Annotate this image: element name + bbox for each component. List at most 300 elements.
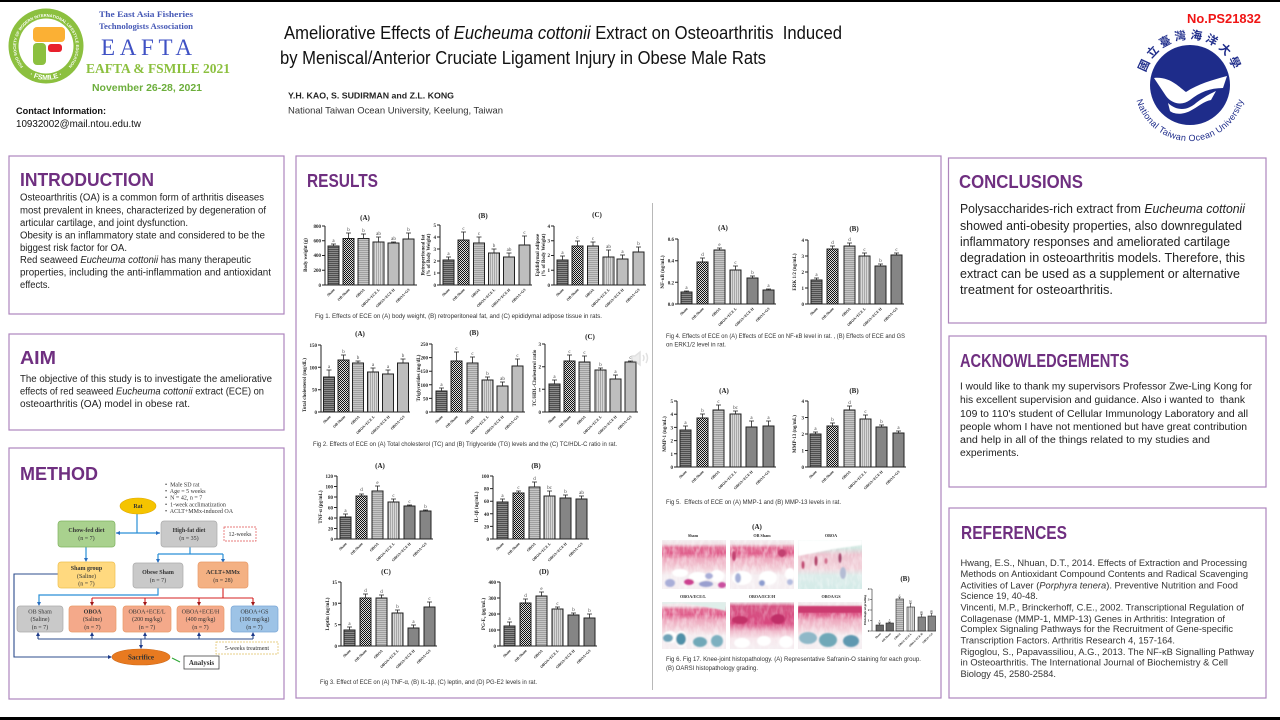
chart: fig 3C leptin: d <box>364 589 367 594</box>
node: OBOA+GS: OBOA+GS <box>240 610 269 616</box>
chart: fig 1C epididymal adipose: (C) <box>592 211 603 219</box>
chart: fig 3C leptin: Sham <box>342 648 352 658</box>
chart: fig 1B retroperitoneal fat: 3 <box>434 248 436 253</box>
chart: fig 3B IL-1 beta: Sham <box>495 541 505 551</box>
chart: fig 1C epididymal adipose: OBOA+ECE L <box>590 288 611 308</box>
EAFTA association name <box>99 9 194 60</box>
chart: fig 2C TC/HDL-C ratio: c <box>583 351 586 356</box>
chart: fig 2B triglycerides: 150 <box>420 370 428 375</box>
chart: fig 3C leptin: OBOA+GS <box>416 649 432 665</box>
chart: fig 2B triglycerides: OB Sham <box>445 414 459 429</box>
flow diagram <box>14 482 278 669</box>
chart: fig 1A body weight: 600 <box>314 240 322 244</box>
chart: fig 3D PG-E2: 0 <box>494 645 496 650</box>
chart: fig 3B IL-1 beta: 0 <box>486 538 490 543</box>
chart: fig 6B OARSI grading: (B) <box>900 575 910 583</box>
chart: fig 3C leptin <box>326 568 437 669</box>
histology label row 2: OBOA/ECE/H <box>749 594 776 599</box>
chart: fig 3D PG-E2: 400 <box>488 581 496 586</box>
chart: fig 1C epididymal adipose: b <box>637 242 640 247</box>
panel: conclusions <box>948 158 1266 323</box>
FSMILE logo: · FSMILE · <box>30 73 61 80</box>
histology image: OBOA/ECE/L <box>662 602 726 649</box>
chart: fig 3D PG-E2: PG-E₂ (pg/mL) <box>482 598 487 630</box>
note: 5 weeks treatment: 5-weeks treatment <box>225 646 269 652</box>
heading: introduction: INTRODUCTION <box>20 170 154 190</box>
contact information: 10932002@mail.ntou.edu.tw <box>16 119 142 130</box>
poster title: by Meniscal/Anterior Cruciate Ligament Injury in Obese Male Rats <box>280 48 766 68</box>
chart: fig 3A TNF-alpha: e <box>376 481 379 486</box>
chart: fig 3D PG-E2: OBOA+GS <box>576 649 592 665</box>
chart: fig 5B MMP-13: b <box>880 420 883 425</box>
caption: fig 4: Fig 4. Effects of ECE on (A) Effects of ECE on NF-κB level in rat. , (B) Effects of ECE and GS <box>666 333 906 340</box>
chart: fig 2C TC/HDL-C ratio: OBOA+GS <box>617 415 633 431</box>
NTOU logo: National Taiwan Ocean University <box>1136 99 1244 142</box>
chart: fig 3B IL-1 beta: a <box>501 494 504 499</box>
chart: fig 2B triglycerides: (B) <box>469 329 479 337</box>
chart: fig 1B retroperitoneal fat: ab <box>507 248 512 253</box>
chart: fig 5A MMP-1: MMP-1 (ng/mL) <box>663 416 668 452</box>
chart: fig 2A total cholesterol: 100 <box>310 366 318 371</box>
chart: fig 3A TNF-alpha: (A) <box>375 462 386 470</box>
histology image: OB sham <box>730 540 794 589</box>
text: references list: Activities of Laver ( Porphyra tenera ). Preventive Nutrition and Food <box>960 581 1238 591</box>
chart: fig 3A TNF-alpha <box>319 462 433 562</box>
caption: fig 1: Fig 1. Effects of ECE on (A) body weight, (B) retroperitoneal fat, and (C) epididymal adipose tissue in rats. <box>315 313 602 320</box>
node: analysis: Analysis <box>189 659 214 667</box>
chart: fig 5A MMP-1: a <box>750 416 753 421</box>
text: introduction body: biggest risk factor for OA. <box>20 243 127 254</box>
chart: fig 6B OARSI grading: 3 <box>868 598 870 602</box>
panel: acknowledgements <box>949 336 1266 487</box>
chart: fig 3D PG-E2 <box>482 568 597 669</box>
EAFTA association name: Technologists Association <box>99 21 193 31</box>
chart: fig 1A body weight: OBOA+ECE L <box>360 288 381 308</box>
chart: fig 4A NF-kB: a <box>685 286 688 291</box>
chart: fig 2C TC/HDL-C ratio: Sham <box>547 414 557 424</box>
chart: fig 2B triglycerides: 100 <box>420 384 428 389</box>
chart: fig 5B MMP-13: b <box>831 418 834 423</box>
chart: fig 5A MMP-1: bc <box>733 406 739 411</box>
chart: fig 6B OARSI grading: OB Sham <box>881 632 892 643</box>
chart: fig 1B retroperitoneal fat: (% of Body Weight) <box>427 233 432 276</box>
text: conclusions body: degradation in osteoarthritis models. Therefore, this <box>960 251 1245 265</box>
node: obese sham: (n = 7) <box>150 577 166 584</box>
histology label row 2: OBOA/ECE/L <box>680 594 706 599</box>
chart: fig 5B MMP-13: 3 <box>802 416 804 422</box>
caption: fig 2: Fig 2. Effects of ECE on (A) Total cholesterol (TC) and (B) Triglyceride (TG) levels and the (C) TC/HDL-C ratio in rat. <box>313 441 617 448</box>
chart: fig 3D PG-E2: OBOA <box>533 649 544 660</box>
chart: fig 3D PG-E2: b <box>588 609 591 614</box>
chart: fig 1C epididymal adipose: a <box>621 250 624 255</box>
node: OBOA: (n = 7) <box>84 624 101 631</box>
heading: method: METHOD <box>20 464 98 484</box>
chart: fig 3B IL-1 beta: OB Sham <box>507 541 521 556</box>
chart: fig 1B retroperitoneal fat: 0 <box>434 284 436 289</box>
chart: fig 6B OARSI grading: 4 <box>868 587 870 591</box>
chart: fig 2B triglycerides: a <box>440 383 443 388</box>
histology label row 2: OBOA/GS <box>821 594 841 599</box>
chart: fig 3D PG-E2: OBOA+ECE L <box>539 649 560 669</box>
study details list <box>165 482 234 515</box>
study details list: • Male SD rat <box>165 482 200 488</box>
chart: fig 1C epididymal adipose: (% of Body Weight) <box>542 233 547 276</box>
figure: histology panel A <box>662 523 862 649</box>
chart: fig 1A body weight: 200 <box>314 269 322 274</box>
poster title <box>280 23 842 68</box>
chart: fig 1B retroperitoneal fat: OBOA+ECE H <box>491 288 511 308</box>
chart: fig 1A body weight <box>304 214 417 308</box>
chart: fig 3B IL-1 beta: OBOA+ECE H <box>547 542 568 562</box>
chart: fig 1B retroperitoneal fat: c <box>462 227 465 232</box>
chart: fig 4A NF-kB: Sham <box>679 306 689 316</box>
chart: fig 5B MMP-13: OBOA+ECE H <box>863 470 884 490</box>
chart: fig 1C epididymal adipose: 3 <box>548 240 550 244</box>
chart: fig 5B MMP-13: (B) <box>849 387 859 395</box>
note: 12 weeks <box>224 527 256 541</box>
chart: fig 2C TC/HDL-C ratio: OBOA+ECE H <box>597 415 618 435</box>
chart: fig 3B IL-1 beta: OBOA <box>526 542 537 553</box>
chart: fig 3C leptin: d <box>380 590 383 595</box>
chart: fig 3B IL-1 beta: 60 <box>484 500 490 505</box>
chart: fig 3A TNF-alpha: OBOA+ECE H <box>391 542 412 562</box>
chart: fig 1C epididymal adipose: OB Sham <box>566 287 580 302</box>
node: high-fat diet: High-fat diet <box>173 528 205 534</box>
text: conclusions body: Polysaccharides-rich extract from Eucheuma cottonii <box>960 202 1246 216</box>
chart: fig 6B OARSI grading: 2 <box>868 608 870 612</box>
chart: fig 5A MMP-1: b <box>701 409 704 414</box>
chart: fig 6B OARSI grading: c <box>899 593 901 597</box>
chart: fig 3B IL-1 beta: b <box>564 490 567 495</box>
chart: fig 2A total cholesterol: b <box>357 356 360 361</box>
chart: fig 2A total cholesterol: OBOA+GS <box>390 415 406 431</box>
node: high-fat diet: (n = 35) <box>179 535 199 542</box>
chart: fig 4B ERK 1/2: OBOA+ECE L <box>846 307 867 327</box>
chart: fig 2A total cholesterol: OBOA+ECE L <box>355 415 376 435</box>
chart: fig 4B ERK 1/2: 3 <box>802 255 804 260</box>
chart: fig 3B IL-1 beta: 40 <box>484 513 490 518</box>
EAFTA association name: EAFTA <box>101 35 192 60</box>
chart: fig 6B OARSI grading: bc <box>909 599 913 603</box>
heading: acknowledgements: ACKNOWLEDGEMENTS <box>960 351 1129 371</box>
chart: fig 5A MMP-1: 4 <box>670 413 674 418</box>
chart: fig 2B triglycerides: OBOA <box>464 415 475 426</box>
chart: fig 1C epididymal adipose: 2 <box>548 254 550 259</box>
text: acknowledgements body <box>960 382 1253 459</box>
chart: fig 5B MMP-13: 1 <box>802 450 804 454</box>
chart: fig 5B MMP-13: MMP-13 (ng/mL) <box>793 415 798 453</box>
text: introduction body: effects. <box>20 280 50 291</box>
caption: fig 4: on ERK1/2 level in rat. <box>666 342 726 348</box>
chart: fig 2A total cholesterol: a <box>328 365 331 370</box>
text: references list: Complex Signaling Pathways for the Recruitment of Gene-specific <box>960 624 1234 634</box>
chart: fig 2C TC/HDL-C ratio: a <box>614 370 617 375</box>
chart: fig 2C TC/HDL-C ratio: 1 <box>538 388 542 393</box>
chart: fig 3D PG-E2: (D) <box>539 568 550 576</box>
text: acknowledgements body: his excellent supervision and guidance. Also i wanted to thank <box>960 395 1246 406</box>
chart: fig 3D PG-E2: e <box>540 587 543 592</box>
heading: aim: AIM <box>20 348 56 368</box>
figure: histology panel A: (A) <box>752 523 763 531</box>
node: chow-fed diet: Chow-fed diet <box>68 528 105 534</box>
chart: fig 1A body weight: b <box>347 228 350 233</box>
chart: fig 3A TNF-alpha: OBOA+GS <box>412 542 428 558</box>
chart: fig 2A total cholesterol: OB Sham <box>332 414 347 429</box>
chart: fig 2C TC/HDL-C ratio: (C) <box>585 333 596 341</box>
chart: fig 2B triglycerides: 0 <box>426 411 428 416</box>
chart: fig 4B ERK 1/2: (B) <box>849 225 859 233</box>
chart: fig 3A TNF-alpha: 40 <box>328 517 334 522</box>
chart: fig 1A body weight: Sham <box>326 287 336 297</box>
chart: fig 1B retroperitoneal fat: (B) <box>478 212 488 220</box>
chart: fig 1B retroperitoneal fat: 1 <box>434 272 436 277</box>
caption: fig 6: Fig 6. Fig 17. Knee-joint histopathology. (A) Representative Safranin-O staining for each group. <box>666 656 921 663</box>
chart: fig 3C leptin: b <box>396 605 399 610</box>
chart: fig 5A MMP-1: OBOA <box>710 470 721 481</box>
chart: fig 3D PG-E2: 300 <box>488 597 496 602</box>
chart: fig 2B triglycerides: 200 <box>420 357 428 362</box>
chart: fig 2A total cholesterol: Total cholesterol (mg/dL) <box>303 358 308 412</box>
text: references list: in Osteoarthritis. The International Journal of Biochemistry & Cell <box>960 658 1228 668</box>
chart: fig 5A MMP-1: c <box>717 400 720 405</box>
chart: fig 4A NF-kB: OB Sham <box>691 306 705 321</box>
chart: fig 3A TNF-alpha: TNF-α (pg/mL) <box>319 490 324 524</box>
chart: fig 2B triglycerides: OBOA+ECE H <box>484 415 505 435</box>
text: references list: Science 19, 40-48. <box>960 591 1038 601</box>
conference title: EAFTA & FSMILE 2021 <box>86 62 230 77</box>
chart: fig 4A NF-kB <box>661 224 776 327</box>
chart: fig 1A body weight: 0 <box>318 284 322 289</box>
chart: fig 2C TC/HDL-C ratio: c <box>568 350 571 355</box>
chart: fig 1B retroperitoneal fat: Sham <box>441 287 451 297</box>
chart: fig 1C epididymal adipose: 1 <box>548 269 550 274</box>
chart: fig 2C TC/HDL-C ratio: a <box>553 375 556 380</box>
chart: fig 1C epididymal adipose: Sham <box>555 287 565 297</box>
chart: fig 5A MMP-1: 5 <box>670 400 674 405</box>
chart: fig 2C TC/HDL-C ratio: c <box>629 356 632 361</box>
chart: fig 1B retroperitoneal fat <box>422 212 532 308</box>
chart: fig 2A total cholesterol: a <box>387 365 390 370</box>
chart: fig 2B triglycerides: Sham <box>434 414 444 424</box>
chart: fig 5A MMP-1 <box>663 387 776 490</box>
chart: fig 1B retroperitoneal fat: 5 <box>434 224 436 229</box>
node: OBOA+ECE/L: (200 mg/kg) <box>132 616 162 623</box>
chart: fig 1B retroperitoneal fat: 4 <box>434 236 436 241</box>
chart: fig 3C leptin: (C) <box>381 568 392 576</box>
chart: fig 1A body weight: 400 <box>314 254 322 259</box>
histology image: OBOA/ECE/H <box>730 602 794 649</box>
chart: fig 6B OARSI grading: ab <box>920 610 923 614</box>
chart: fig 4A NF-kB: OBOA+ECE H <box>734 307 755 327</box>
chart: fig 1A body weight: OBOA+ECE H <box>375 288 396 308</box>
flow arrows: dark blue <box>14 574 255 659</box>
chart: fig 2A total cholesterol: (A) <box>355 330 366 338</box>
caption: fig 6: (B) OARSI histopathology grading. <box>666 665 758 672</box>
chart: fig 3C leptin: OB Sham <box>354 648 368 663</box>
chart: fig 1B retroperitoneal fat: 2 <box>434 260 436 265</box>
text: references list: Hwang, E.S., Nhuan, D.T., 2014. Effects of Extraction and Processing <box>960 558 1247 568</box>
histology image: OBOA <box>798 540 862 589</box>
chart: fig 3C leptin: 5 <box>334 624 338 629</box>
chart: fig 6B OARSI grading: OBOA <box>894 633 902 641</box>
chart: fig 3D PG-E2: a <box>508 617 511 622</box>
chart: fig 1B retroperitoneal fat: OBOA+ECE L <box>476 288 497 308</box>
chart: fig 4B ERK 1/2: d <box>831 241 834 246</box>
caption: fig 6 <box>666 656 921 672</box>
text: aim body: effects of red seaweed Eucheuma cottonii extract (ECE) on <box>20 386 264 398</box>
caption: fig 4 <box>666 333 906 348</box>
chart: fig 6B OARSI grading: ab <box>930 609 933 613</box>
chart: fig 1B retroperitoneal fat: b <box>493 244 496 249</box>
chart: fig 4B ERK 1/2: 2 <box>802 271 804 276</box>
chart: fig 3A TNF-alpha: c <box>408 500 411 505</box>
node: chow-fed diet <box>58 521 115 547</box>
chart: fig 2C TC/HDL-C ratio: TC/HDL-Cholesterol ratio <box>533 349 538 406</box>
node: ACLT+MMx: (n = 28) <box>213 577 233 584</box>
chart: fig 2B triglycerides: OBOA+GS <box>504 415 520 431</box>
node: OBOA+GS: (n = 7) <box>246 624 263 631</box>
chart: fig 1A body weight: OBOA+GS <box>395 288 411 304</box>
chart: fig 3A TNF-alpha: 80 <box>328 496 334 501</box>
chart: fig 6B OARSI grading: Histological grading <box>863 595 867 625</box>
chart: fig 6B OARSI grading: a <box>879 618 881 622</box>
chart: fig 4B ERK 1/2: OB Sham <box>821 306 835 321</box>
chart: fig 6B OARSI grading: 1 <box>868 618 870 622</box>
chart: fig 4B ERK 1/2: 4 <box>802 239 804 244</box>
chart: fig 2A total cholesterol <box>303 330 410 435</box>
text: introduction body <box>20 192 271 291</box>
chart: fig 4B ERK 1/2: b <box>879 259 882 264</box>
chart: fig 3C leptin: 10 <box>332 602 338 607</box>
chart: fig 1A body weight: a <box>332 239 335 244</box>
authors: Y.H. KAO, S. SUDIRMAN and Z.L. KONG <box>288 90 454 100</box>
chart: fig 2B triglycerides: c <box>471 352 474 357</box>
node: OBOA+ECE/H: (n = 7) <box>192 624 209 631</box>
chart: fig 4B ERK 1/2: a <box>815 273 818 278</box>
node: sacrifice: Sacrifice <box>128 654 154 662</box>
chart: fig 1C epididymal adipose: ab <box>606 245 611 250</box>
histology image: OBOA/GS <box>798 602 862 649</box>
histology label row 1: OB Sham <box>753 533 771 538</box>
chart: fig 3D PG-E2: c <box>556 602 559 607</box>
node: OBOA+ECE/H: OBOA+ECE/H <box>182 610 220 616</box>
chart: fig 1C epididymal adipose: Epididymal adipose <box>536 233 541 276</box>
text: references list: Rigoglou, S., Papavassiliou, A.G., 2013. The NF-κB Signalling Pathway <box>960 647 1255 657</box>
chart: fig 3D PG-E2: Sham <box>502 648 512 658</box>
text: references list: Methods on Antioxidant Compound Contents and Radical Scavenging <box>960 569 1248 579</box>
chart: fig 3A TNF-alpha: 120 <box>326 475 334 480</box>
chart: fig 1B retroperitoneal fat: c <box>523 231 526 236</box>
chart: fig 1C epididymal adipose: OBOA+ECE H <box>604 288 625 308</box>
chart: fig 1B retroperitoneal fat: a <box>447 252 450 257</box>
chart: fig 3B IL-1 beta: 20 <box>484 525 490 530</box>
chart: fig 1B retroperitoneal fat: OBOA+GS <box>511 288 527 304</box>
text: aim body: osteoarthritis (OA) model in obese rat. <box>20 399 190 410</box>
panel: introduction <box>9 156 284 314</box>
node: OB sham: OB Sham <box>28 610 52 616</box>
chart: fig 3C leptin: 15 <box>332 581 338 586</box>
chart: fig 3C leptin: 0 <box>334 645 338 650</box>
chart: fig 5A MMP-1: a <box>684 421 687 426</box>
flow arrows: light blue <box>37 513 225 606</box>
chart: fig 1C epididymal adipose: OBOA+GS <box>625 288 641 304</box>
chart: fig 2A total cholesterol: b <box>402 354 405 359</box>
node: OBOA+ECE/L: OBOA+ECE/L <box>128 610 166 616</box>
chart: fig 6B OARSI grading: 0 <box>868 629 870 633</box>
chart: fig 2C TC/HDL-C ratio: OBOA+ECE L <box>582 415 603 435</box>
node: OBOA+GS: (100 mg/kg) <box>240 616 269 623</box>
text: aim body <box>20 374 272 410</box>
chart: fig 1C epididymal adipose: c <box>592 237 595 242</box>
chart: fig 1C epididymal adipose: OBOA <box>584 288 595 299</box>
node: sham group: (n = 7) <box>78 580 95 588</box>
chart: fig 3C leptin: c <box>428 597 431 602</box>
histology label row 2 <box>680 594 841 599</box>
study details list: • N = 42, n = 7 <box>165 496 202 502</box>
heading: references: REFERENCES <box>961 523 1067 543</box>
chart: fig 2B triglycerides: 50 <box>423 397 428 402</box>
chart: fig 2C TC/HDL-C ratio: 0 <box>538 411 542 416</box>
chart: fig 2C TC/HDL-C ratio: b <box>599 363 602 368</box>
chart: fig 6B OARSI grading: OBOA+ECE L <box>898 632 913 648</box>
chart: fig 3B IL-1 beta: (B) <box>531 462 541 470</box>
panel: references <box>949 508 1266 698</box>
chart: fig 4B ERK 1/2: OBOA+GS <box>883 307 899 323</box>
node: OBOA+GS <box>231 606 278 632</box>
chart: fig 3A TNF-alpha: 20 <box>328 528 334 532</box>
chart: fig 3A TNF-alpha: OBOA+ECE L <box>375 542 396 562</box>
chart: fig 3B IL-1 beta: bc <box>547 486 553 491</box>
chart: fig 4B ERK 1/2 <box>793 225 904 327</box>
chart: fig 3C leptin: a <box>348 622 351 627</box>
chart: fig 5A MMP-1: 3 <box>670 426 674 431</box>
node: OBOA <box>69 606 116 632</box>
chart: fig 6B OARSI grading <box>863 575 936 648</box>
chart: fig 1B retroperitoneal fat: c <box>478 232 481 237</box>
chart: fig 2B triglycerides: Triglycerides (mg/dL) <box>417 354 422 401</box>
chart: fig 3D PG-E2: d <box>524 594 527 599</box>
chart: fig 3A TNF-alpha: Sham <box>338 541 348 551</box>
chart: fig 5B MMP-13: 2 <box>802 433 804 438</box>
chart: fig 5A MMP-1: 2 <box>670 440 674 445</box>
chart: fig 3A TNF-alpha: b <box>424 505 427 510</box>
text: introduction body: Obesity is an inflammatory state and considered to be the <box>20 230 265 242</box>
panel: aim <box>9 334 284 430</box>
contact information: Contact Information: <box>16 106 106 117</box>
text: introduction body: Red seaweed Eucheuma cottonii has many therapeutic <box>20 255 251 266</box>
chart: fig 2C TC/HDL-C ratio: 2 <box>538 366 542 371</box>
chart: fig 5A MMP-1: OBOA+ECE L <box>717 470 738 490</box>
chart: fig 1A body weight: OB Sham <box>337 287 351 302</box>
text: conclusions body: extract can be used as a supplement or alternative <box>960 267 1240 281</box>
chart: fig 1B retroperitoneal fat: Retroperitoneal fat <box>422 234 426 275</box>
caption: fig 3: Fig 3. Effect of ECE on (A) TNF-α, (B) IL-1β, (C) leptin, and (D) PG-E2 levels in rat. <box>320 679 537 686</box>
node: OBOA: (Saline) <box>83 616 102 623</box>
chart: fig 2A total cholesterol: 0 <box>314 411 318 416</box>
chart: fig 2A total cholesterol: b <box>342 350 345 355</box>
histology label row 1 <box>688 533 837 538</box>
chart: fig 1C epididymal adipose: a <box>561 251 564 256</box>
chart: fig 4A NF-kB: OBOA <box>711 307 722 318</box>
chart: fig 1A body weight: 800 <box>314 225 322 230</box>
chart: fig 4A NF-kB: d <box>701 253 704 258</box>
text: conclusions body: showed anti-obesity properties, also downregulated <box>960 219 1242 233</box>
bottom black strip <box>0 717 1280 720</box>
text: references list: Vincenti, M.P., Brinckerhoff, C.E., 2002. Transcriptional Regulation of <box>960 603 1245 613</box>
chart: fig 3A TNF-alpha: 0 <box>330 538 334 543</box>
chart: fig 4A NF-kB: NF-κB (ng/mL) <box>661 255 666 289</box>
panel: method <box>9 448 284 699</box>
